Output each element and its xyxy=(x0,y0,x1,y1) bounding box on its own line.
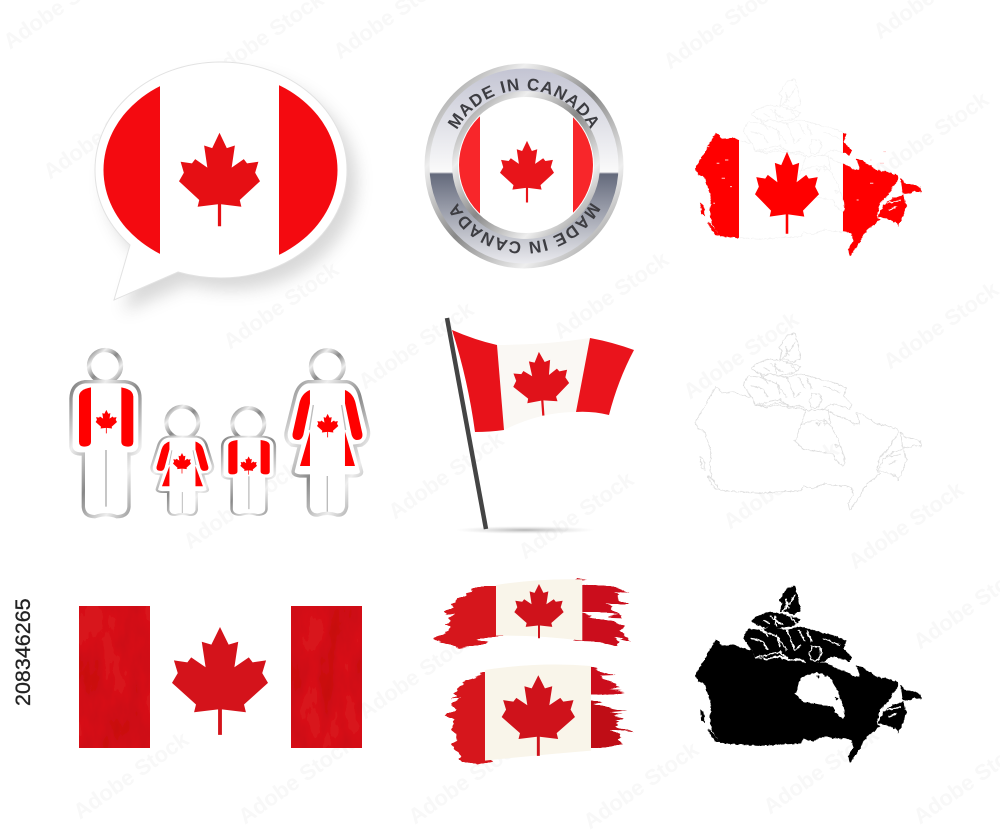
brush stroke flags xyxy=(437,579,632,765)
badge outer ring xyxy=(427,66,621,266)
faint map outline xyxy=(695,79,921,257)
lower brush flag xyxy=(445,665,632,765)
stock watermark: Adobe Stock xyxy=(844,476,969,574)
family pictograms xyxy=(71,350,369,517)
bubble body xyxy=(95,62,347,300)
flag white field xyxy=(497,338,590,430)
upper brush flag xyxy=(437,579,630,647)
black silhouette map of canada xyxy=(695,586,921,763)
left red part xyxy=(695,132,739,238)
stock watermark: Adobe Stock xyxy=(384,426,509,524)
waving flag on pole xyxy=(447,318,634,534)
waving flag leaf xyxy=(511,350,571,418)
stock watermark: Adobe Stock xyxy=(69,726,194,824)
large maple leaf xyxy=(172,627,268,735)
speech bubble flag xyxy=(95,60,357,312)
stock watermark: Adobe Stock xyxy=(579,736,704,833)
flag right stripe xyxy=(576,338,634,415)
map land xyxy=(695,586,921,763)
stock watermark: Adobe Stock xyxy=(179,456,304,554)
badge inner ring xyxy=(455,94,597,236)
man xyxy=(71,350,140,517)
stock watermark: Adobe Stock xyxy=(234,731,359,829)
stock watermark: Adobe Stock xyxy=(404,731,529,829)
stock watermark: Adobe Stock xyxy=(219,256,344,354)
textured rectangular flag xyxy=(79,606,362,748)
bubble flag stripes xyxy=(104,85,338,255)
outline map of canada xyxy=(695,333,921,511)
map channels xyxy=(752,595,900,717)
girl xyxy=(152,407,213,515)
flag left stripe xyxy=(452,330,504,432)
infographic canvas xyxy=(15,60,922,764)
stock watermark: Adobe Stock xyxy=(759,721,884,819)
stock watermark: Adobe Stock xyxy=(869,86,994,184)
bubble maple leaf xyxy=(179,133,260,226)
stock watermark: Adobe Stock xyxy=(354,626,479,724)
stock watermark: Adobe Stock xyxy=(879,276,1000,374)
stock watermark: Adobe Stock xyxy=(39,86,164,184)
pole shadow xyxy=(455,526,595,534)
badge flag xyxy=(459,116,593,214)
flag pole xyxy=(447,318,486,529)
right red bar xyxy=(291,606,362,748)
badge leaf xyxy=(500,141,554,202)
badge top text: MADE IN CANADA xyxy=(448,78,598,130)
right red part xyxy=(842,133,922,256)
stock watermark: Adobe Stock xyxy=(679,306,804,404)
stock watermark: Adobe Stock xyxy=(719,436,844,534)
stock watermark: Adobe Stock xyxy=(549,246,674,344)
bubble shadow xyxy=(105,74,357,312)
left red bar xyxy=(79,606,150,748)
badge bottom text: MADE IN CANADA xyxy=(450,203,600,254)
image id number: 208346265 xyxy=(11,598,35,706)
flag-filled map of canada xyxy=(695,79,921,257)
boy xyxy=(222,408,275,515)
stock watermark: Adobe Stock xyxy=(514,466,639,564)
made in canada badge xyxy=(424,64,624,268)
map maple leaf xyxy=(755,152,819,234)
stock watermark: Adobe Stock xyxy=(354,296,479,394)
woman xyxy=(286,350,369,515)
